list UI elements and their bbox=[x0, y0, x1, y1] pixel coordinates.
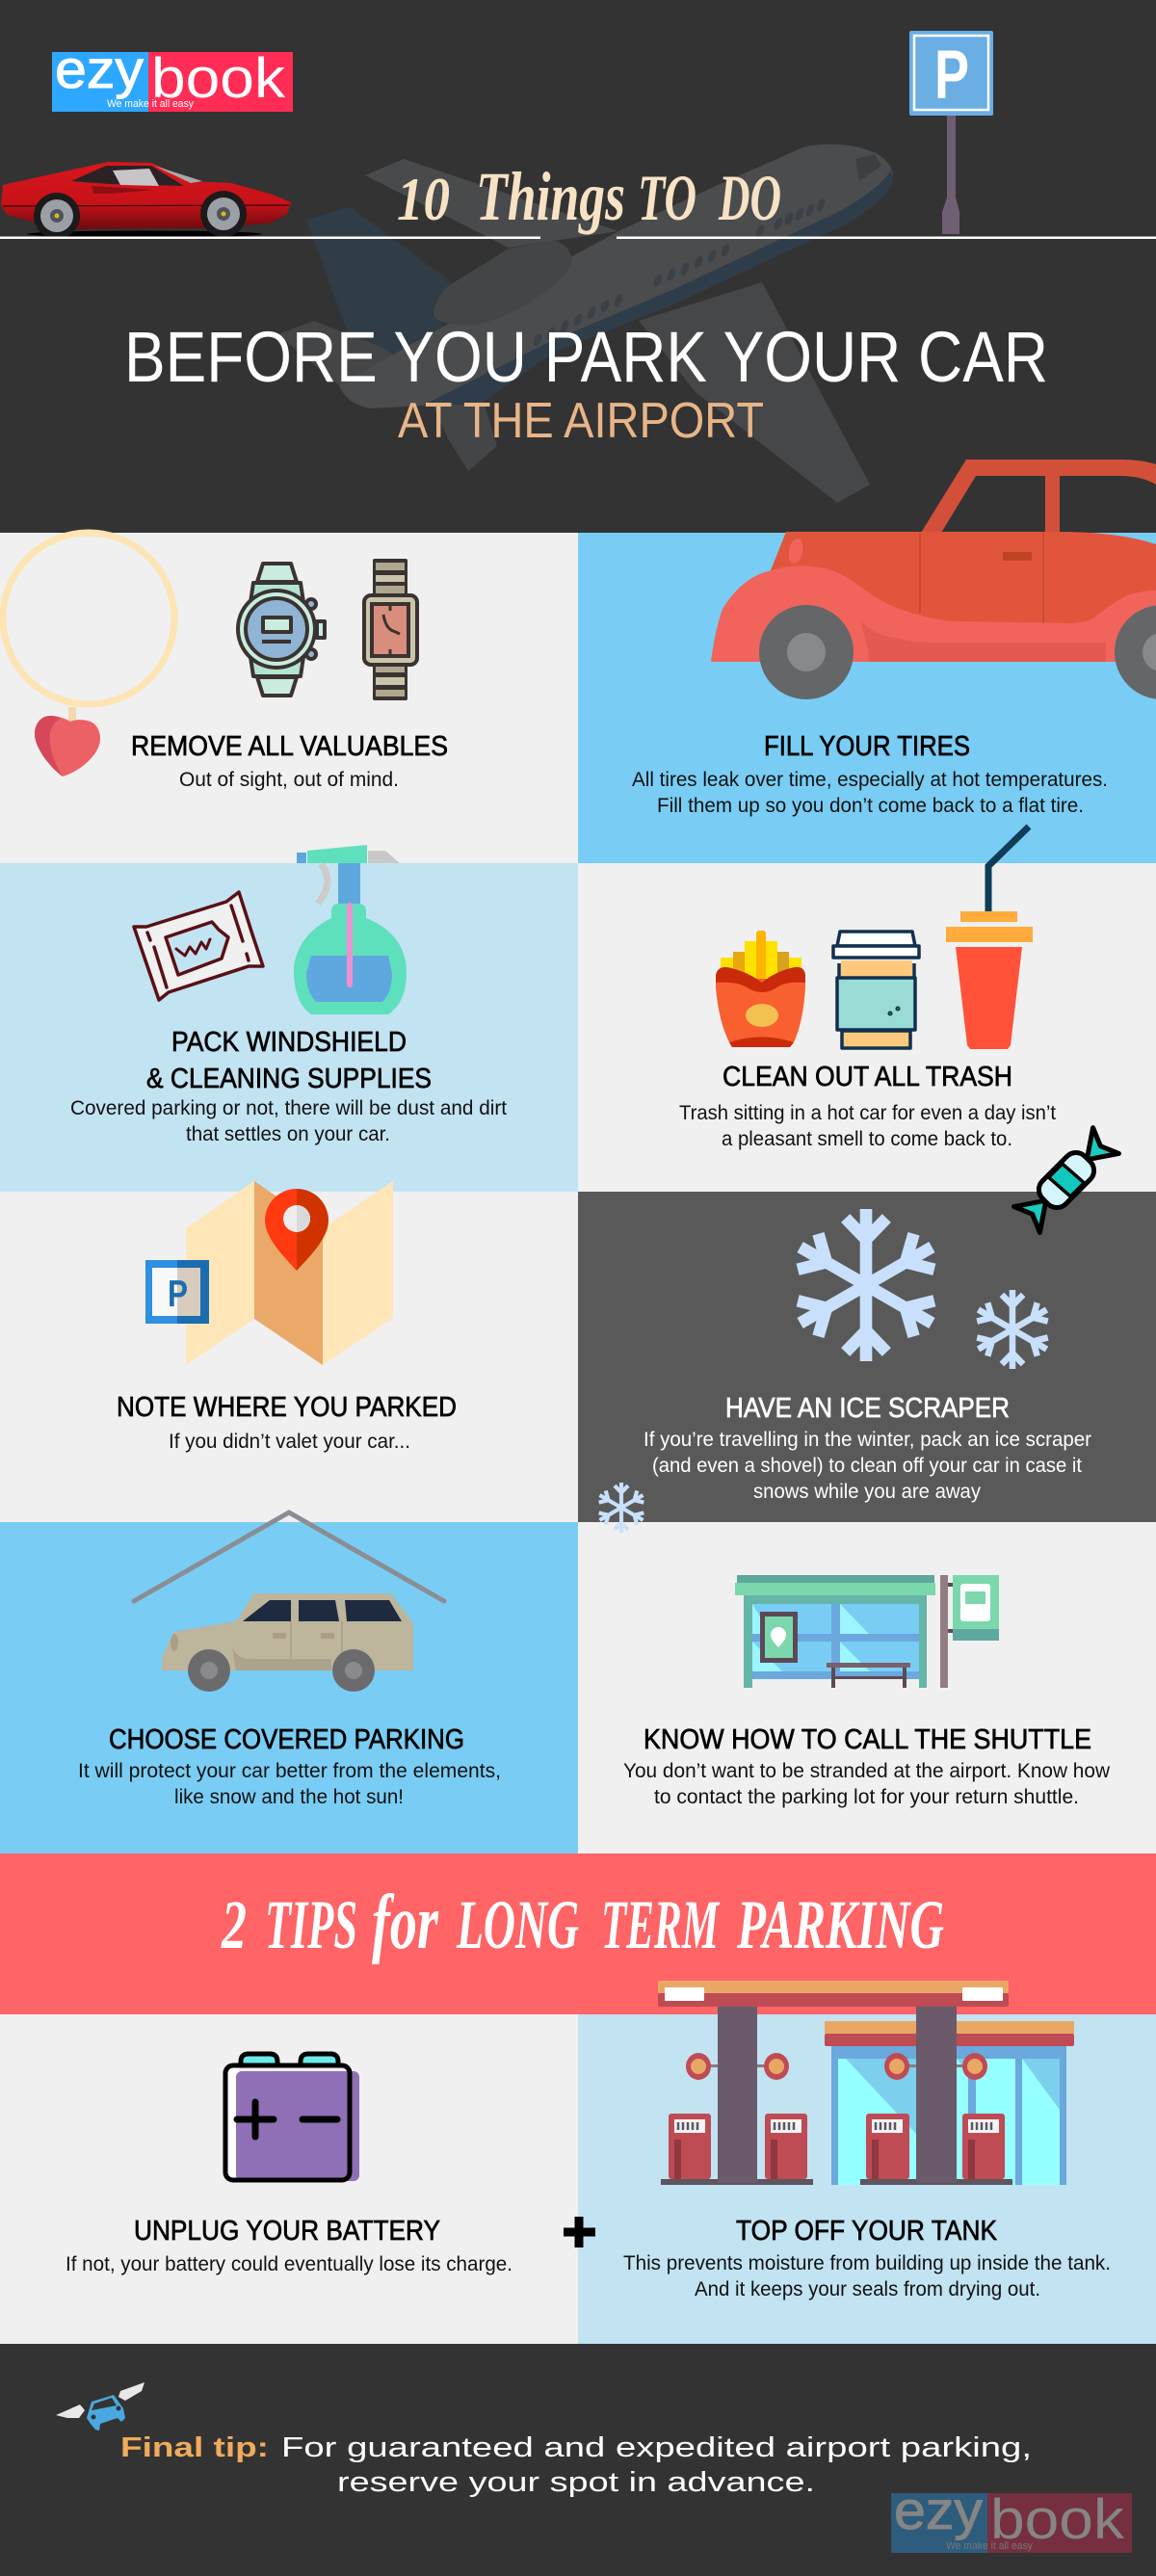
banner: 2 tips for long term parking: for bbox=[372, 1880, 439, 1965]
panel: clean out all trash bbox=[578, 827, 1156, 1192]
heading: REMOVE ALL VALUABLES bbox=[131, 731, 448, 762]
heading: NOTE WHERE YOU PARKED bbox=[117, 1392, 457, 1423]
body text: to contact the parking lot for your return shuttle. bbox=[654, 1786, 1079, 1808]
rule: left header line bbox=[0, 237, 540, 239]
panel: choose covered parking bbox=[0, 1512, 578, 1853]
icon: large snowflake bbox=[790, 1209, 942, 1361]
icon: beige suv bbox=[162, 1593, 413, 1692]
heading: & CLEANING SUPPLIES bbox=[146, 1064, 432, 1094]
panel: fill your tires bbox=[578, 460, 1156, 863]
banner: 2 tips for long term parking: 2 bbox=[221, 1886, 247, 1963]
body text: And it keeps your seals from drying out. bbox=[695, 2278, 1040, 2300]
body text: Trash sitting in a hot car for even a day isn’t bbox=[679, 1102, 1056, 1124]
icon: parking sign: P bbox=[934, 38, 969, 114]
icon: soda cup with straw bbox=[946, 827, 1033, 1049]
title: 10 Things to do: TO bbox=[638, 161, 696, 234]
banner: 2 tips for long term parking: TERM bbox=[601, 1886, 721, 1963]
icon: rectangular watch bbox=[364, 559, 417, 700]
icon: heart necklace bbox=[3, 533, 174, 776]
subtitle: at the airport: AT THE AIRPORT bbox=[398, 393, 764, 449]
body text: Out of sight, out of mind. bbox=[179, 769, 399, 791]
icon: coffee cup bbox=[833, 932, 919, 1048]
body text: that settles on your car. bbox=[186, 1123, 390, 1145]
banner: 2 tips for long term parking: TIPS bbox=[265, 1886, 357, 1963]
icon: red sports car bbox=[1, 162, 291, 239]
logo: faded ezybook: book bbox=[990, 2488, 1125, 2551]
logo: ezybook: We make it all easy bbox=[107, 98, 194, 110]
banner: 2 tips for long term parking bbox=[0, 1853, 1156, 2014]
body text: Fill them up so you don’t come back to a flat tire. bbox=[657, 795, 1084, 817]
body text: Covered parking or not, there will be dust and dirt bbox=[70, 1097, 507, 1119]
panel: final tip footer bbox=[0, 2344, 1156, 2576]
icon: wipes packet bbox=[134, 892, 263, 1000]
body text bbox=[78, 1760, 501, 1808]
body text: All tires leak over time, especially at hot temperatures. bbox=[632, 769, 1108, 791]
banner: 2 tips for long term parking: LONG bbox=[456, 1886, 579, 1963]
panel: top off your tank bbox=[578, 1981, 1156, 2344]
panel: note where you parked bbox=[0, 1181, 578, 1522]
panel: unplug your battery bbox=[0, 2014, 578, 2344]
icon: bus stop bbox=[735, 1575, 999, 1688]
heading: FILL YOUR TIRES bbox=[764, 731, 970, 762]
logo: faded ezybook: ezy bbox=[894, 2480, 983, 2540]
title: 10 Things to do bbox=[397, 158, 781, 235]
text: final tip: For guaranteed and expedited airport parking, bbox=[281, 2432, 1032, 2463]
heading: CHOOSE COVERED PARKING bbox=[109, 1724, 464, 1755]
body text: If not, your battery could eventually lose its charge. bbox=[66, 2253, 512, 2275]
icon: folded map with pin bbox=[186, 1181, 393, 1365]
icon: vintage red car bbox=[711, 460, 1156, 699]
body text bbox=[623, 2252, 1111, 2300]
body text: If you didn’t valet your car... bbox=[169, 1431, 410, 1453]
body text bbox=[679, 1102, 1056, 1150]
body text: like snow and the hot sun! bbox=[174, 1786, 404, 1808]
title: 10 Things to do: 10 bbox=[397, 165, 450, 233]
icon: airplane background bbox=[277, 145, 893, 503]
icon: winged car bbox=[56, 2382, 144, 2431]
icon: spray bottle bbox=[294, 845, 407, 1014]
body text: This prevents moisture from building up inside the tank. bbox=[623, 2252, 1111, 2274]
heading: CLEAN OUT ALL TRASH bbox=[722, 1062, 1012, 1092]
icon: parking sign bbox=[909, 31, 993, 234]
panel: header bbox=[0, 0, 1156, 533]
banner: 2 tips for long term parking: PARKING bbox=[736, 1886, 944, 1963]
logo: faded ezybook bbox=[891, 2480, 1132, 2553]
icon: carport roof bbox=[134, 1512, 444, 1601]
heading: TOP OFF YOUR TANK bbox=[736, 2216, 998, 2247]
logo: ezybook: book bbox=[151, 47, 286, 110]
logo: faded ezybook: We make it all easy bbox=[946, 2540, 1033, 2552]
body text: If you’re travelling in the winter, pack an ice scraper bbox=[644, 1429, 1091, 1451]
body text bbox=[632, 769, 1108, 817]
rule: right header line bbox=[617, 237, 1156, 239]
icon: battery bbox=[225, 2054, 359, 2181]
icon: french fries bbox=[716, 931, 805, 1047]
heading: UNPLUG YOUR BATTERY bbox=[134, 2216, 440, 2247]
heading: KNOW HOW TO CALL THE SHUTTLE bbox=[644, 1724, 1091, 1755]
icon: gas station bbox=[658, 1981, 1074, 2185]
body text: a pleasant smell to come back to. bbox=[722, 1128, 1012, 1150]
body text: snows while you are away bbox=[753, 1481, 981, 1503]
title: 10 Things to do: DO bbox=[718, 161, 781, 234]
body text: (and even a shovel) to clean off your car in case it bbox=[652, 1455, 1082, 1477]
panel: pack windshield and cleaning supplies bbox=[0, 845, 578, 1192]
title: 10 Things to do: Things bbox=[476, 158, 625, 235]
body text: You don’t want to be stranded at the airport. Know how bbox=[623, 1760, 1111, 1782]
body text bbox=[623, 1760, 1111, 1808]
icon: small parking sign: P bbox=[168, 1274, 188, 1315]
icon: candy bbox=[1014, 1128, 1118, 1232]
icon: small parking sign bbox=[145, 1260, 209, 1324]
panel: have an ice scraper bbox=[578, 1192, 1156, 1522]
heading: PACK WINDSHIELD bbox=[171, 1027, 407, 1058]
heading: HAVE AN ICE SCRAPER bbox=[725, 1393, 1010, 1424]
text: final tip: Final tip: bbox=[120, 2432, 269, 2463]
heading bbox=[146, 1027, 432, 1094]
body text: It will protect your car better from the elements, bbox=[78, 1760, 501, 1782]
icon: round watch bbox=[238, 564, 325, 696]
panel: remove all valuables bbox=[0, 533, 578, 863]
icon: medium snowflake bbox=[973, 1290, 1052, 1369]
icon: small snowflake bbox=[596, 1483, 646, 1533]
body text bbox=[70, 1097, 507, 1145]
text: final tip: reserve your spot in advance. bbox=[337, 2467, 815, 2498]
text: final tip bbox=[120, 2432, 1032, 2498]
logo: ezybook bbox=[52, 39, 293, 112]
body text bbox=[644, 1429, 1091, 1503]
panel: know how to call the shuttle bbox=[578, 1522, 1156, 1853]
icon: plus sign bbox=[564, 2217, 595, 2247]
logo: ezybook: ezy bbox=[55, 39, 144, 99]
